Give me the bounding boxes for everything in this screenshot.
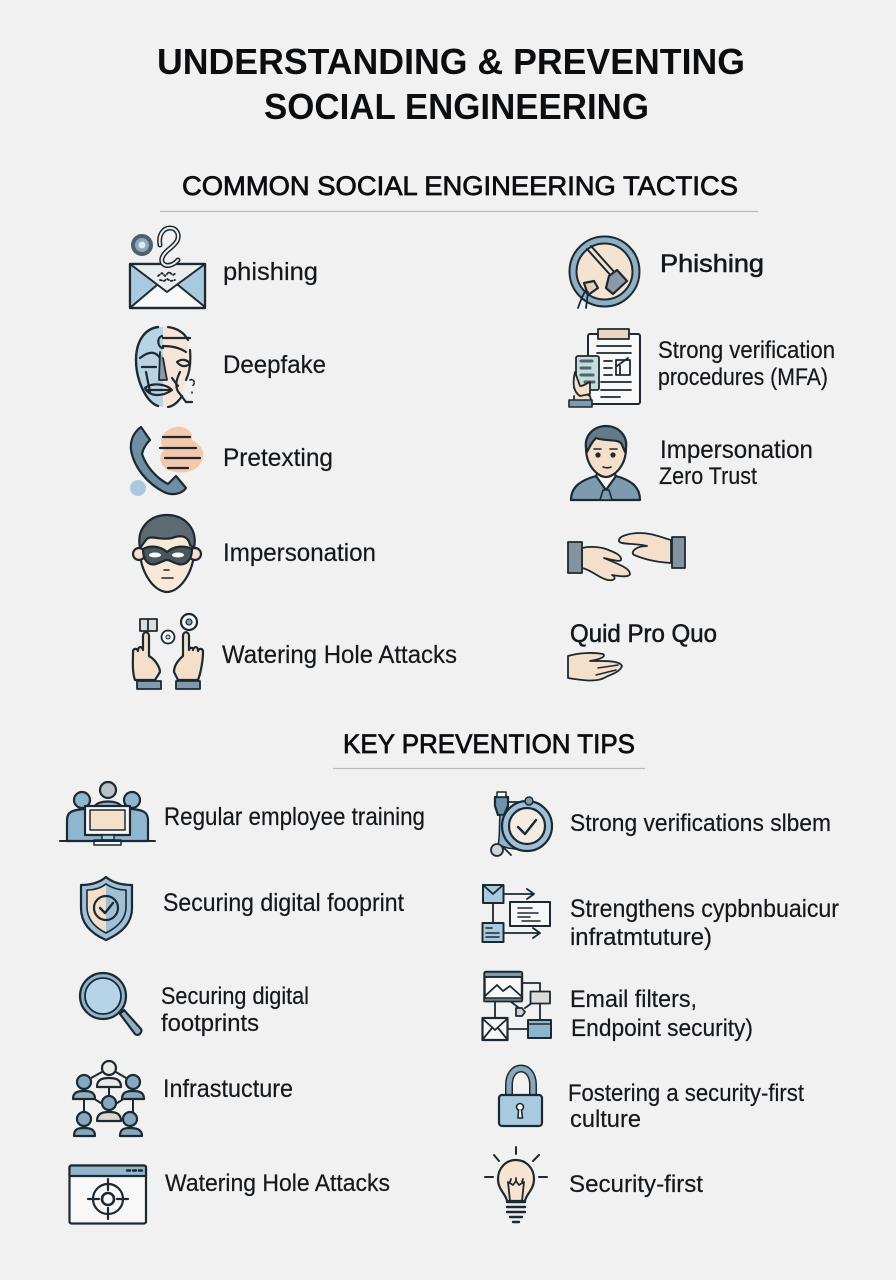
icon: prohibited rod — [570, 236, 640, 308]
panel: common social engineering tactics — [130, 171, 835, 689]
label: fostering a security-first culture — [568, 1080, 804, 1133]
label: pretexting: Pretexting — [223, 444, 333, 472]
label: strengthens cypbnbuaicur infratmtuture — [570, 895, 839, 951]
icon: clipboard and phone — [569, 329, 640, 407]
icon: team at monitor — [60, 782, 155, 845]
icon: two reaching hands — [568, 533, 685, 580]
tip: strong verifications — [491, 792, 831, 856]
label: strong verifications slbem: Strong verifications slbem — [570, 810, 831, 837]
tactic: impersonation zero trust — [571, 426, 813, 500]
tip: securing digital footprint — [81, 877, 404, 940]
tactic: handshake hands — [568, 533, 685, 580]
tactic: quid pro quo — [568, 620, 717, 680]
label: fostering a security-first culture: Fostering a security-first — [568, 1080, 804, 1107]
label: strengthens cypbnbuaicur infratmtuture: infratmtuture) — [570, 924, 712, 951]
label: security-first: Security-first — [569, 1171, 703, 1198]
label: infrastucture: Infrastucture — [163, 1075, 293, 1103]
icon: masked face — [133, 515, 201, 592]
label: strong verification procedures — [658, 337, 835, 391]
icon: people network — [73, 1061, 144, 1136]
icon: magnifying glass — [80, 973, 141, 1035]
label: watering hole attacks: Watering Hole Attacks — [222, 641, 457, 669]
icon: email network — [482, 972, 551, 1040]
heading: prevention tips: KEY PREVENTION TIPS — [343, 729, 635, 759]
label: impersonation zero trust: Zero Trust — [659, 463, 757, 490]
label: strong verification procedures: procedures (MFA) — [658, 364, 828, 391]
icon: mail flow diagram — [482, 885, 550, 942]
icon: hands and targets — [133, 614, 203, 689]
icon: padlock — [499, 1068, 542, 1126]
label: impersonation: Impersonation — [223, 539, 376, 567]
tip: email filters endpoint security — [482, 972, 753, 1042]
title: UNDERSTANDING & PREVENTING — [157, 41, 745, 82]
icon: verification seal with gear — [491, 792, 552, 856]
label: impersonation zero trust — [659, 436, 813, 490]
icon: browser with target — [70, 1166, 146, 1224]
heading: tactics: COMMON SOCIAL ENGINEERING TACTICS — [182, 171, 738, 201]
icon: half-and-half face — [136, 327, 194, 407]
tactic: phishing — [130, 228, 318, 308]
label: fostering a security-first culture: culture — [570, 1106, 641, 1133]
tactic: impersonation — [133, 515, 376, 592]
tactic: pretexting — [130, 427, 333, 496]
label: phishing: phishing — [223, 258, 318, 286]
tip: security-first — [485, 1147, 703, 1222]
label: deepfake: Deepfake — [223, 351, 326, 379]
label: securing digital footprints — [161, 983, 309, 1037]
label: securing digital footprints: footprints — [161, 1010, 259, 1037]
tip: fostering a security-first culture — [499, 1068, 804, 1133]
title: SOCIAL ENGINEERING — [264, 86, 649, 127]
label: watering hole attacks tip: Watering Hole Attacks — [165, 1170, 390, 1197]
icon: open hand — [568, 653, 622, 680]
label: securing digital footprints: Securing digital — [161, 983, 309, 1010]
label: strong verification procedures: Strong verification — [658, 337, 835, 364]
tip: securing digital footprints — [80, 973, 309, 1037]
title — [157, 41, 745, 127]
tactic: watering hole attacks — [133, 614, 457, 689]
tip: strengthens cyber infrastructure — [482, 885, 839, 951]
icon: man in suit — [571, 426, 640, 500]
label: phishing bold: Phishing — [660, 250, 764, 278]
tactic: deepfake — [136, 327, 326, 407]
tip: regular employee training — [60, 782, 425, 845]
icon: phone with speech — [130, 427, 203, 496]
panel: key prevention tips — [60, 729, 839, 1224]
tip: infrastructure — [73, 1061, 293, 1136]
label: securing digital fooprint: Securing digital fooprint — [163, 889, 404, 917]
tip: watering hole attacks — [70, 1166, 390, 1224]
tactic: strong verification procedures — [569, 329, 835, 407]
label: email filters endpoint security: Endpoint security) — [571, 1015, 753, 1042]
icon: light bulb — [485, 1147, 547, 1222]
label: regular employee training: Regular employee training — [164, 803, 425, 831]
icon: phishing envelope and hook — [130, 228, 205, 308]
label: quid pro quo: Quid Pro Quo — [570, 620, 717, 648]
icon: shield with check — [81, 877, 132, 940]
label: impersonation zero trust: Impersonation — [660, 436, 813, 464]
label: strengthens cypbnbuaicur infratmtuture: Strengthens cypbnbuaicur — [570, 895, 839, 923]
label: email filters endpoint security — [570, 986, 753, 1042]
tactic: phishing no-symbol — [570, 236, 764, 308]
label: email filters endpoint security: Email filters, — [570, 986, 697, 1013]
